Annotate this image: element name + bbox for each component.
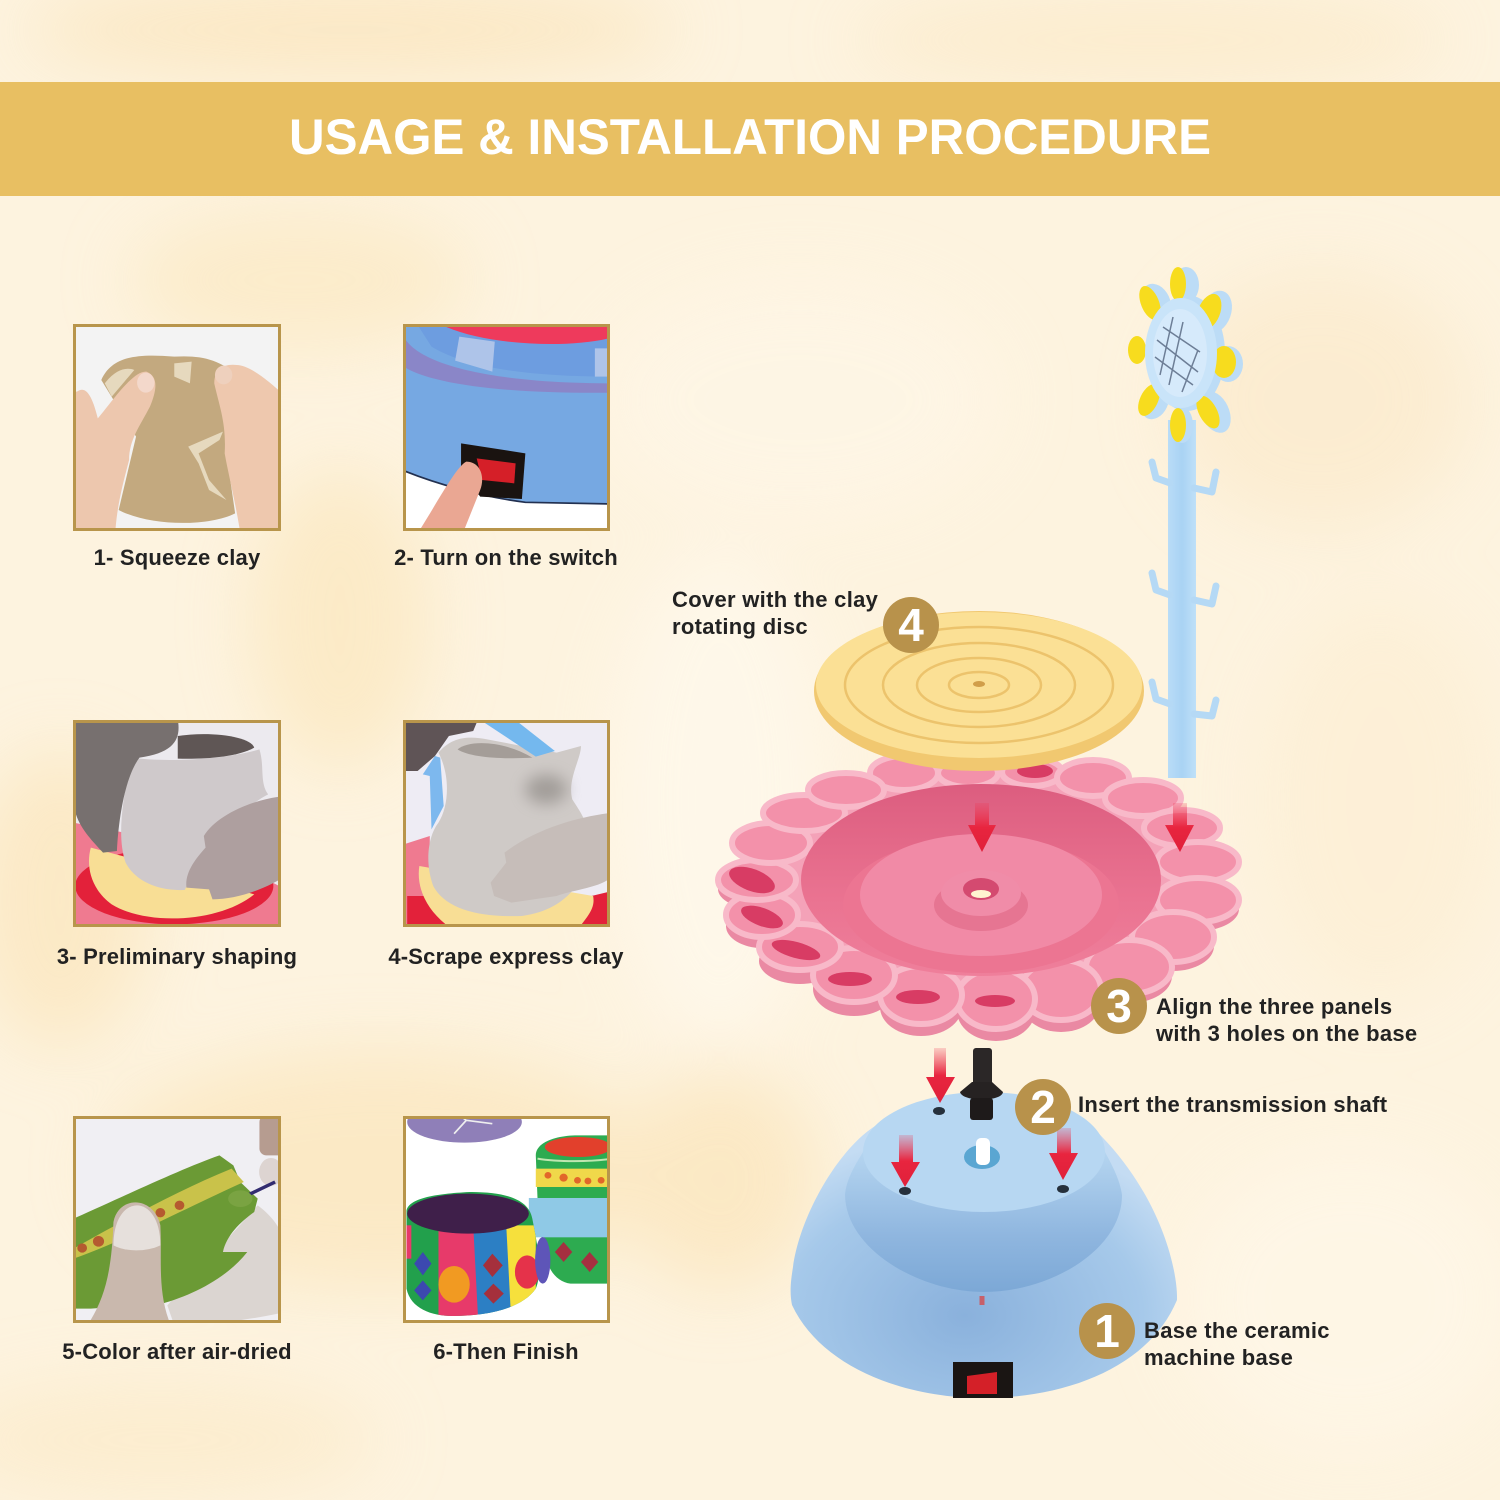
screw holes (899, 1107, 1069, 1195)
badge 1: 1 (1094, 1305, 1120, 1357)
step 4 caption: 4-Scrape express clay (388, 944, 624, 969)
title banner (0, 82, 1500, 196)
shaft hole (964, 1145, 1000, 1169)
petals (718, 756, 1239, 1029)
tray hub (843, 834, 1119, 973)
tray underside (718, 869, 1239, 1041)
lower body (791, 1123, 1177, 1398)
step 2 photo: turn on the switch (400, 320, 616, 533)
step 6 caption: 6-Then Finish (433, 1339, 579, 1364)
tool stem (1152, 420, 1216, 778)
step 5 photo: color after air-dried (70, 1112, 286, 1325)
red arrows on base (891, 1048, 1078, 1187)
badge 2 (1015, 1079, 1071, 1135)
step 2 caption: 2- Turn on the switch (394, 545, 618, 570)
step 1 photo: squeeze clay (70, 320, 286, 533)
petal holes (726, 764, 1053, 1007)
switch (953, 1362, 1013, 1398)
badge 3: 3 (1106, 980, 1132, 1032)
badge 3 (1091, 978, 1147, 1034)
sunflower head (1128, 267, 1243, 443)
label: machine base: Base the ceramic (1144, 1318, 1330, 1343)
transmission shaft (960, 1048, 1003, 1120)
step 4 photo: scrape express clay (400, 716, 616, 929)
label: align panels: Align the three panels (1156, 994, 1392, 1019)
step 5 caption: 5-Color after air-dried (62, 1339, 292, 1364)
title: USAGE & INSTALLATION PROCEDURE (289, 109, 1211, 165)
label: insert shaft: Insert the transmission shaft (1078, 1092, 1388, 1117)
badge 1 (1079, 1303, 1135, 1359)
top face (863, 1092, 1105, 1212)
label: machine base: machine base (1144, 1345, 1293, 1370)
blue machine base (791, 1092, 1177, 1398)
step 1 caption: 1- Squeeze clay (94, 545, 261, 570)
step 6 photo: then finish (403, 1116, 610, 1323)
step 3 caption: 3- Preliminary shaping (57, 944, 297, 969)
badge 4 (883, 597, 939, 653)
badge 4: 4 (898, 599, 924, 651)
yellow rotating disc (814, 611, 1144, 771)
label: align panels: with 3 holes on the base (1155, 1021, 1417, 1046)
label: cover with disc: rotating disc (672, 614, 808, 639)
label: cover with disc: Cover with the clay (672, 587, 879, 612)
upper tier (845, 1152, 1122, 1292)
red arrows on tray (968, 803, 1194, 852)
step 3 photo: preliminary shaping (70, 716, 286, 929)
sunflower tool (1128, 267, 1243, 778)
badge 2: 2 (1030, 1081, 1056, 1133)
tray well (801, 784, 1161, 976)
pink petal tray (718, 756, 1239, 1041)
